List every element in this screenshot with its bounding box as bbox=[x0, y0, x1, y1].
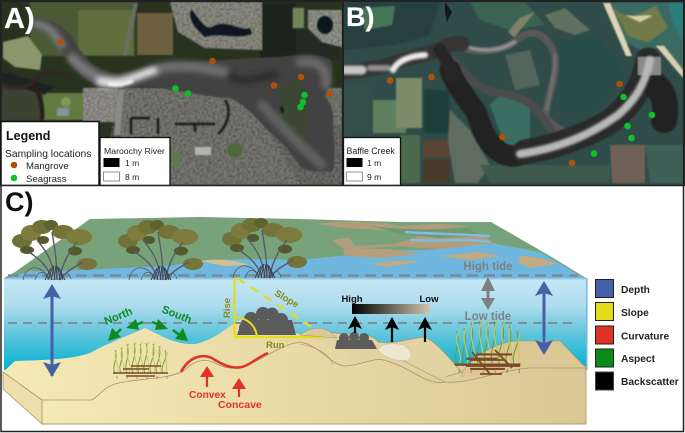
rock patch right bbox=[335, 332, 377, 349]
legend: sampling locations: Sampling locations bbox=[5, 149, 91, 160]
legend: sampling locations: Seagrass bbox=[26, 174, 67, 185]
legend: Maroochy River depth bbox=[100, 138, 170, 186]
small sand mound bbox=[300, 328, 337, 338]
green land surface bbox=[4, 217, 586, 278]
panel label B: B) bbox=[346, 2, 374, 32]
mangrove tree 2 bbox=[118, 220, 203, 280]
estuary surface water bbox=[4, 244, 586, 279]
slope triangle bbox=[222, 278, 325, 351]
variable key bbox=[596, 280, 679, 390]
legend: Baffle Creek depth: Baffle Creek bbox=[346, 146, 395, 156]
legend: sampling locations: Legend bbox=[6, 129, 50, 143]
sand base under block bbox=[296, 366, 586, 424]
curvature line and labels bbox=[181, 353, 268, 411]
panel label A: A) bbox=[4, 3, 35, 35]
river bathymetry bbox=[33, 17, 334, 172]
front face of block bbox=[42, 342, 586, 424]
seagrass patch left bbox=[113, 342, 168, 379]
curvature line and labels: Convex bbox=[189, 390, 226, 401]
sampling points: mangrove bbox=[57, 39, 333, 97]
curvature line and labels: Concave bbox=[218, 399, 262, 411]
legend: Maroochy River depth: Maroochy River bbox=[104, 146, 165, 156]
panel: B) Baffle Creek map bbox=[343, 0, 685, 186]
rubble patch bbox=[378, 344, 411, 361]
panel: A) Maroochy River map bbox=[0, 0, 343, 186]
panel label C: C) bbox=[5, 187, 34, 217]
aspect labels and arrows bbox=[103, 304, 194, 341]
backscatter gradient bar: Low bbox=[420, 294, 439, 305]
arrow: depth right bbox=[535, 281, 553, 355]
backscatter gradient bar bbox=[341, 294, 439, 342]
sand and channel detail on land bbox=[316, 222, 500, 250]
high tide line bbox=[8, 274, 578, 277]
arrow: depth left bbox=[43, 284, 61, 377]
aspect labels and arrows: South bbox=[160, 304, 194, 327]
aspect labels and arrows: North bbox=[103, 306, 135, 328]
legend: sampling locations: Mangrove bbox=[26, 161, 69, 172]
key: depth: Depth bbox=[621, 285, 650, 296]
legend: Maroochy River depth: 8 m bbox=[125, 172, 139, 182]
sand bars in water bbox=[200, 249, 557, 268]
legend: sampling locations bbox=[1, 122, 99, 186]
sampling points: seagrass bbox=[591, 94, 655, 157]
sand seabed top bbox=[3, 320, 586, 424]
legend: Baffle Creek depth: 1 m bbox=[367, 158, 381, 168]
seagrass patch right bbox=[454, 320, 520, 374]
key: curvature: Curvature bbox=[621, 332, 669, 342]
sampling points: seagrass bbox=[172, 85, 308, 110]
key: backscatter: Backscatter bbox=[621, 377, 679, 388]
mangrove tree 3 bbox=[222, 218, 307, 278]
legend: Maroochy River depth: 1 m bbox=[125, 158, 139, 168]
tide labels and arrow: High tide bbox=[463, 261, 513, 273]
slope triangle: Slope bbox=[272, 288, 300, 311]
mangrove tree 1 bbox=[12, 220, 97, 280]
slope triangle: Run bbox=[266, 340, 285, 351]
urban texture bbox=[83, 2, 342, 185]
backscatter gradient bar: High bbox=[341, 294, 363, 305]
slope triangle: Rise bbox=[222, 298, 233, 318]
tide labels and arrow: Low tide bbox=[465, 311, 511, 323]
creek bathymetry bbox=[344, 33, 665, 156]
legend: Baffle Creek depth: 9 m bbox=[367, 172, 381, 182]
water body bbox=[4, 278, 586, 370]
key: slope: Slope bbox=[621, 308, 649, 319]
rock outcrop bbox=[237, 307, 296, 335]
block diagram bbox=[3, 217, 588, 424]
tide labels and arrow bbox=[463, 261, 513, 323]
sampling points: mangrove bbox=[387, 74, 623, 166]
legend: Baffle Creek depth bbox=[344, 138, 400, 186]
panel: C) conceptual diagram bbox=[1, 186, 684, 432]
key: aspect: Aspect bbox=[621, 354, 656, 365]
sediment back layer bbox=[296, 329, 462, 384]
low tide line bbox=[8, 322, 578, 324]
